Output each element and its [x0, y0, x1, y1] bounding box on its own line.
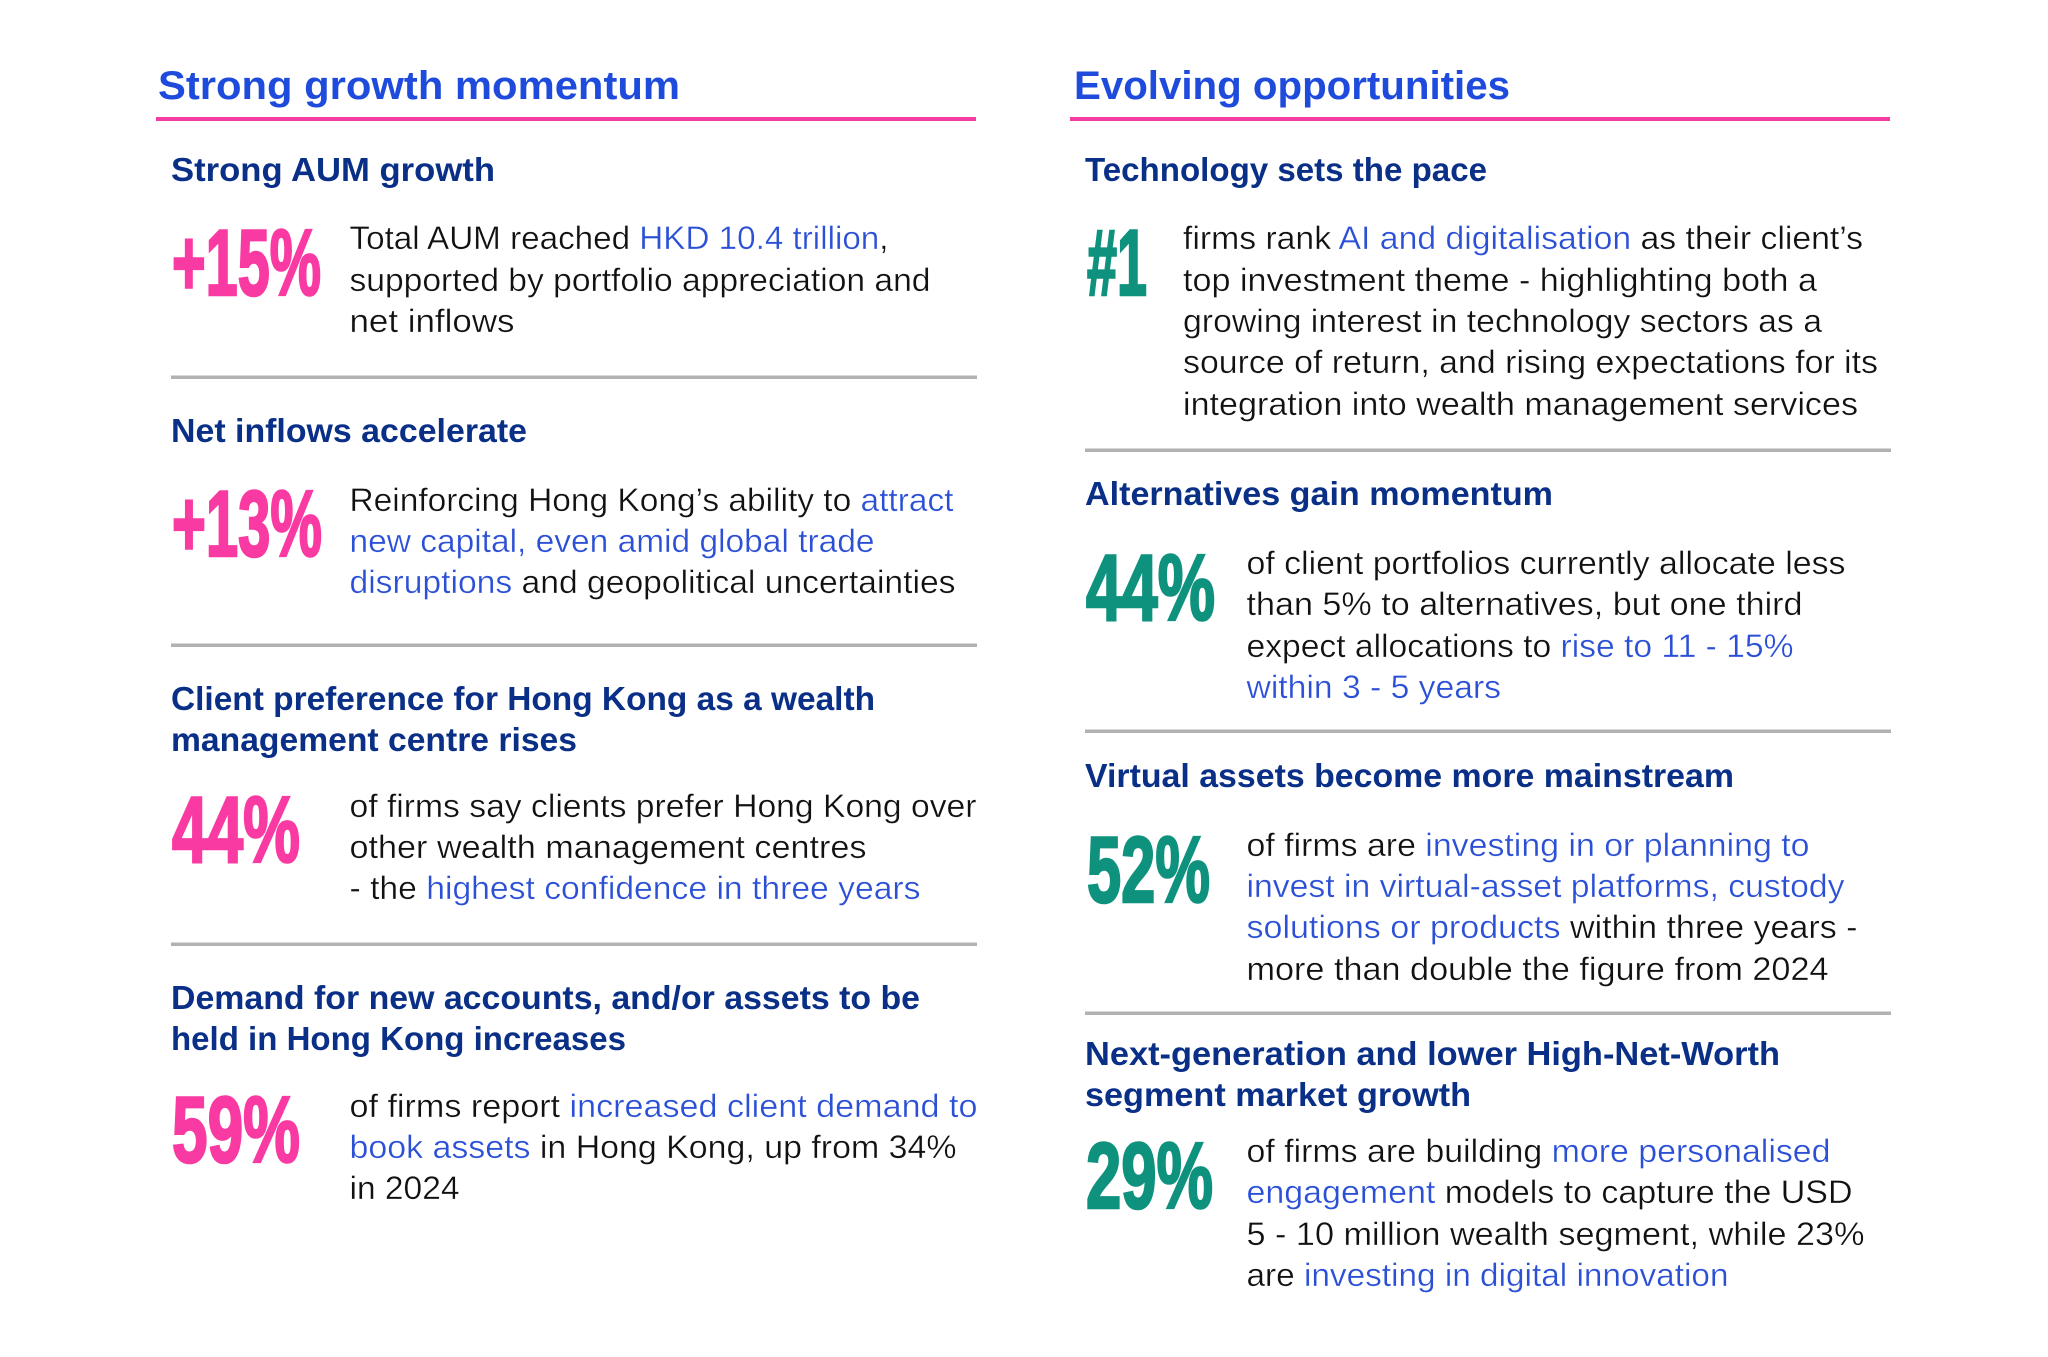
subheading: Virtual assets become more mainstream [1085, 757, 1734, 794]
subheading [1085, 1035, 1780, 1113]
item: technology sets the pace [1085, 151, 1878, 422]
body text: of firms are investing in or planning to [1246, 827, 1810, 863]
body text: of firms are building more personalised [1246, 1133, 1830, 1169]
stat: #1: #1 [1087, 210, 1147, 315]
stat: 44%: 44% [1086, 535, 1215, 640]
body text [1246, 1133, 1864, 1293]
heading: strong growth momentum: Strong growth momentum [158, 64, 680, 108]
body text: Total AUM reached HKD 10.4 trillion , [350, 220, 888, 256]
body text: Reinforcing Hong Kong’s ability to attract [350, 482, 954, 518]
body text [1245, 545, 1846, 705]
subheading: Client preference for Hong Kong as a wealth [171, 680, 875, 717]
body text [350, 788, 977, 906]
body text [1246, 827, 1858, 987]
body text: - the highest confidence in three years [350, 870, 920, 906]
body text: integration into wealth management services [1183, 386, 1858, 422]
body text: new capital, even amid global trade [350, 523, 874, 559]
heading: strong growth momentum [156, 64, 976, 121]
subheading: segment market growth [1085, 1076, 1471, 1113]
body text: top investment theme - highlighting both a [1183, 262, 1817, 298]
item: client preference for Hong Kong [171, 680, 977, 906]
body text: disruptions and geopolitical uncertainties [350, 564, 956, 600]
item: demand for new accounts [171, 979, 977, 1206]
subheading: Strong AUM growth [171, 151, 495, 188]
stat: 52%: 52% [1087, 817, 1210, 922]
body text: supported by portfolio appreciation and [350, 262, 930, 298]
body text: other wealth management centres [350, 829, 866, 865]
item: net inflows accelerate [171, 412, 956, 600]
stat: 44%: 44% [172, 777, 300, 882]
item: alternatives gain momentum [1085, 475, 1846, 705]
body text: net inflows [350, 303, 514, 339]
body text: firms rank AI and digitalisation as their client’s [1183, 220, 1863, 256]
body text: of firms say clients prefer Hong Kong over [350, 788, 977, 824]
body text: engagement models to capture the USD [1246, 1174, 1852, 1210]
body text: of client portfolios currently allocate less [1246, 545, 1846, 581]
body text [350, 1088, 977, 1206]
heading: evolving opportunities [1070, 64, 1890, 121]
stat: +15%: +15% [172, 210, 321, 315]
subheading: management centre rises [171, 721, 577, 758]
subheading [171, 680, 875, 758]
panel: evolving opportunities [1070, 64, 1891, 1293]
body text: within 3 - 5 years [1245, 669, 1501, 705]
body text [1183, 220, 1878, 422]
subheading: Technology sets the pace [1085, 151, 1487, 188]
subheading: Net inflows accelerate [171, 412, 527, 449]
item: next-generation and lower high-net-worth [1085, 1035, 1864, 1293]
body text: in 2024 [350, 1170, 460, 1206]
heading: evolving opportunities: Evolving opportunities [1074, 64, 1510, 108]
subheading: Demand for new accounts, and/or assets to be [171, 979, 920, 1016]
body text [350, 482, 956, 600]
body text: than 5% to alternatives, but one third [1246, 586, 1802, 622]
subheading: held in Hong Kong increases [171, 1020, 626, 1057]
body text: invest in virtual-asset platforms, custody [1246, 868, 1844, 904]
panel: strong growth momentum [156, 64, 977, 1206]
stat: 29%: 29% [1086, 1123, 1213, 1228]
body text: source of return, and rising expectations for its [1183, 344, 1878, 380]
stat: 59%: 59% [172, 1077, 300, 1182]
body text: 5 - 10 million wealth segment, while 23% [1246, 1216, 1864, 1252]
body text: expect allocations to rise to 11 - 15% [1246, 628, 1794, 664]
body text: of firms report increased client demand to [350, 1088, 977, 1124]
subheading [171, 979, 920, 1057]
item: virtual assets become more mainstream [1085, 757, 1858, 987]
body text: solutions or products within three years - [1246, 909, 1858, 945]
subheading: Alternatives gain momentum [1085, 475, 1553, 512]
stat: +13%: +13% [172, 471, 322, 576]
item: strong AUM growth [171, 151, 930, 339]
body text: growing interest in technology sectors as a [1183, 303, 1822, 339]
body text [350, 220, 930, 339]
body text: book assets in Hong Kong, up from 34% [350, 1129, 956, 1165]
body text: are investing in digital innovation [1246, 1257, 1728, 1293]
subheading: Next-generation and lower High-Net-Worth [1085, 1035, 1780, 1072]
body text: more than double the figure from 2024 [1246, 951, 1828, 987]
